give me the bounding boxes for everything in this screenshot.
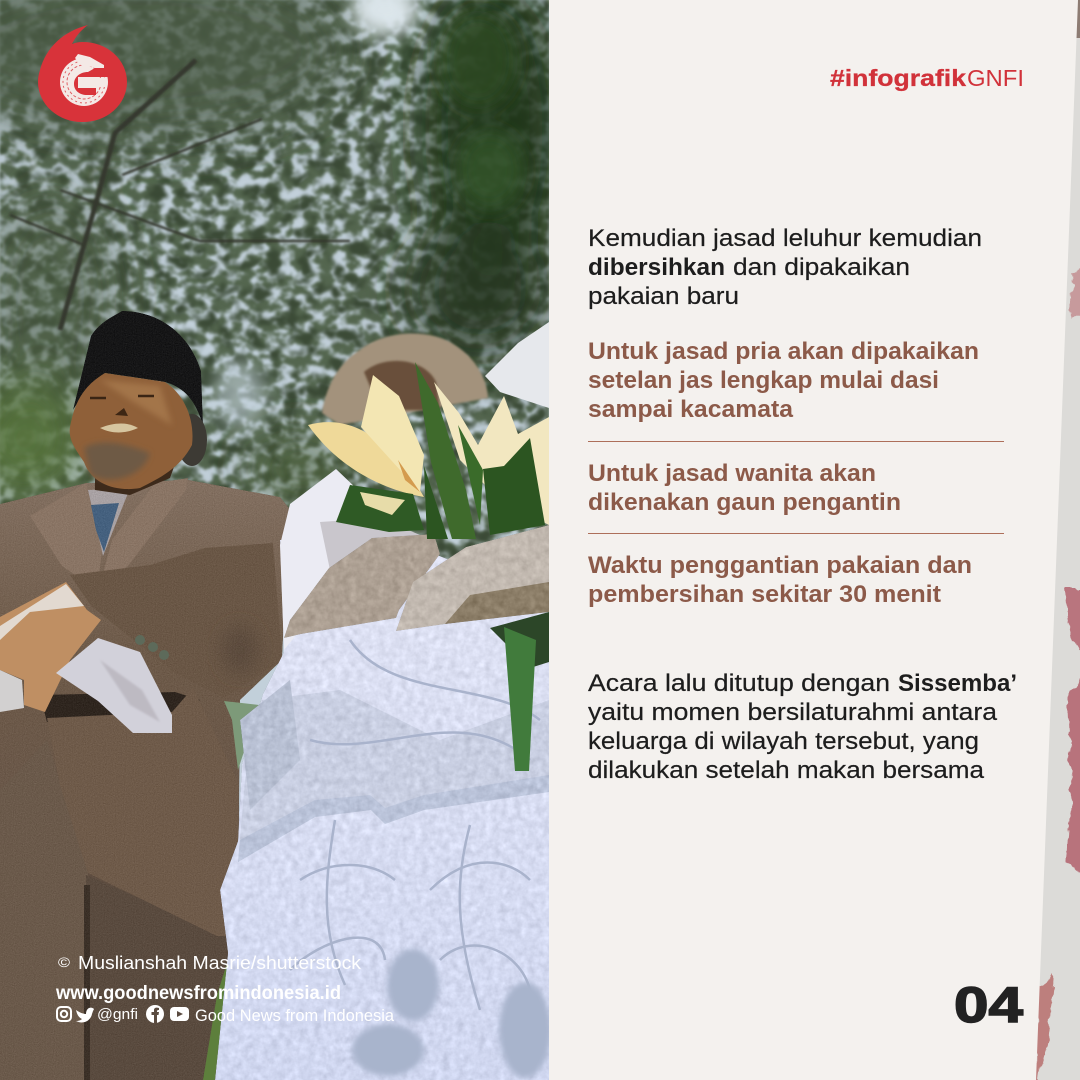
photo: mummified couple in suit and wedding dress — [0, 0, 565, 1080]
photo credit: © — [58, 954, 71, 970]
man in brown suit — [0, 311, 289, 1080]
text block: men's clothing: setelan jas lengkap mulai dasi — [588, 367, 939, 394]
bodice top — [280, 469, 354, 650]
neck — [95, 468, 174, 495]
text block: women's clothing: Untuk jasad wanita akan — [588, 460, 876, 487]
hashtag heading — [830, 65, 1024, 91]
icon: youtube — [170, 1007, 189, 1021]
text block: cleaning paragraph: dibersihkan — [588, 254, 725, 281]
lace bands — [240, 690, 549, 840]
text block: closing paragraph: keluarga di wilayah tersebut, yang — [588, 728, 979, 755]
logo speech-drop shape — [38, 25, 127, 122]
front flap — [47, 696, 199, 722]
icon: facebook — [146, 1005, 164, 1023]
head — [70, 373, 193, 489]
icon: twitter — [76, 1008, 94, 1022]
sleeve — [70, 543, 279, 630]
text block: duration: pembersihan sekitar 30 menit — [588, 581, 941, 608]
icon: instagram — [57, 1007, 71, 1021]
text block: men's clothing: sampai kacamata — [588, 396, 794, 423]
website url: www.goodnewsfromindonesia.id — [55, 983, 341, 1004]
suit jacket — [0, 480, 289, 840]
text block: women's clothing: dikenakan gaun pengantin — [588, 489, 901, 516]
text block: cleaning paragraph: dan dipakaikan — [733, 254, 910, 281]
text block: closing paragraph: Sissemba’ — [898, 670, 1017, 697]
dark foliage under bouquet — [490, 612, 549, 668]
white glove — [56, 638, 172, 733]
text block: closing paragraph — [588, 670, 1017, 784]
logo eagle G emblem — [60, 54, 110, 106]
text block: men's clothing — [588, 338, 979, 423]
text block: women's clothing — [588, 460, 901, 516]
trousers and lower jacket — [0, 740, 88, 1080]
text block: cleaning paragraph: pakaian baru — [588, 283, 739, 310]
shadow behind hands — [40, 692, 200, 722]
hashtag heading: #infografik — [830, 65, 966, 91]
handle: @gnfi — [97, 1006, 138, 1023]
text block: cleaning paragraph: Kemudian jasad leluhur kemudian — [588, 225, 982, 252]
flower bouquet — [308, 362, 549, 539]
text block: closing paragraph: yaitu momen bersilaturahmi antara — [588, 699, 998, 726]
dress body — [215, 540, 549, 1080]
shirt and tie — [88, 488, 130, 556]
jacket buttons — [135, 635, 169, 660]
hat — [73, 311, 203, 425]
tree canopy background — [0, 0, 565, 560]
text block: duration: Waktu penggantian pakaian dan — [588, 552, 972, 579]
text block: closing paragraph: Acara lalu ditutup dengan — [588, 670, 890, 697]
orange-stained glove — [0, 582, 101, 712]
hashtag heading: GNFI — [967, 65, 1024, 91]
head with veil — [322, 334, 488, 425]
channel name: Good News from Indonesia — [195, 1007, 395, 1025]
bouquet stem — [504, 627, 536, 771]
text block: closing paragraph: dilakukan setelah makan bersama — [588, 757, 985, 784]
text block: cleaning paragraph — [588, 225, 982, 310]
woman in white wedding dress — [215, 322, 551, 1080]
right-edge weathered wall strip — [1030, 0, 1080, 1080]
logo: GNFI — [38, 25, 127, 122]
page number: 04 — [954, 977, 1023, 1033]
text block: men's clothing: Untuk jasad pria akan dipakaikan — [588, 338, 979, 365]
lapels — [30, 483, 102, 574]
photo credit: Muslianshah Masrie/shutterstock — [78, 953, 362, 973]
photo credit — [58, 956, 361, 969]
panel: text background — [549, 0, 1078, 1080]
lower-body base — [0, 740, 220, 1080]
lace gloves — [284, 525, 549, 638]
lower lace embroidery — [290, 640, 540, 1010]
hair — [182, 414, 207, 466]
social media row — [57, 1005, 395, 1025]
green gap — [224, 701, 259, 770]
text block: duration — [588, 552, 972, 608]
